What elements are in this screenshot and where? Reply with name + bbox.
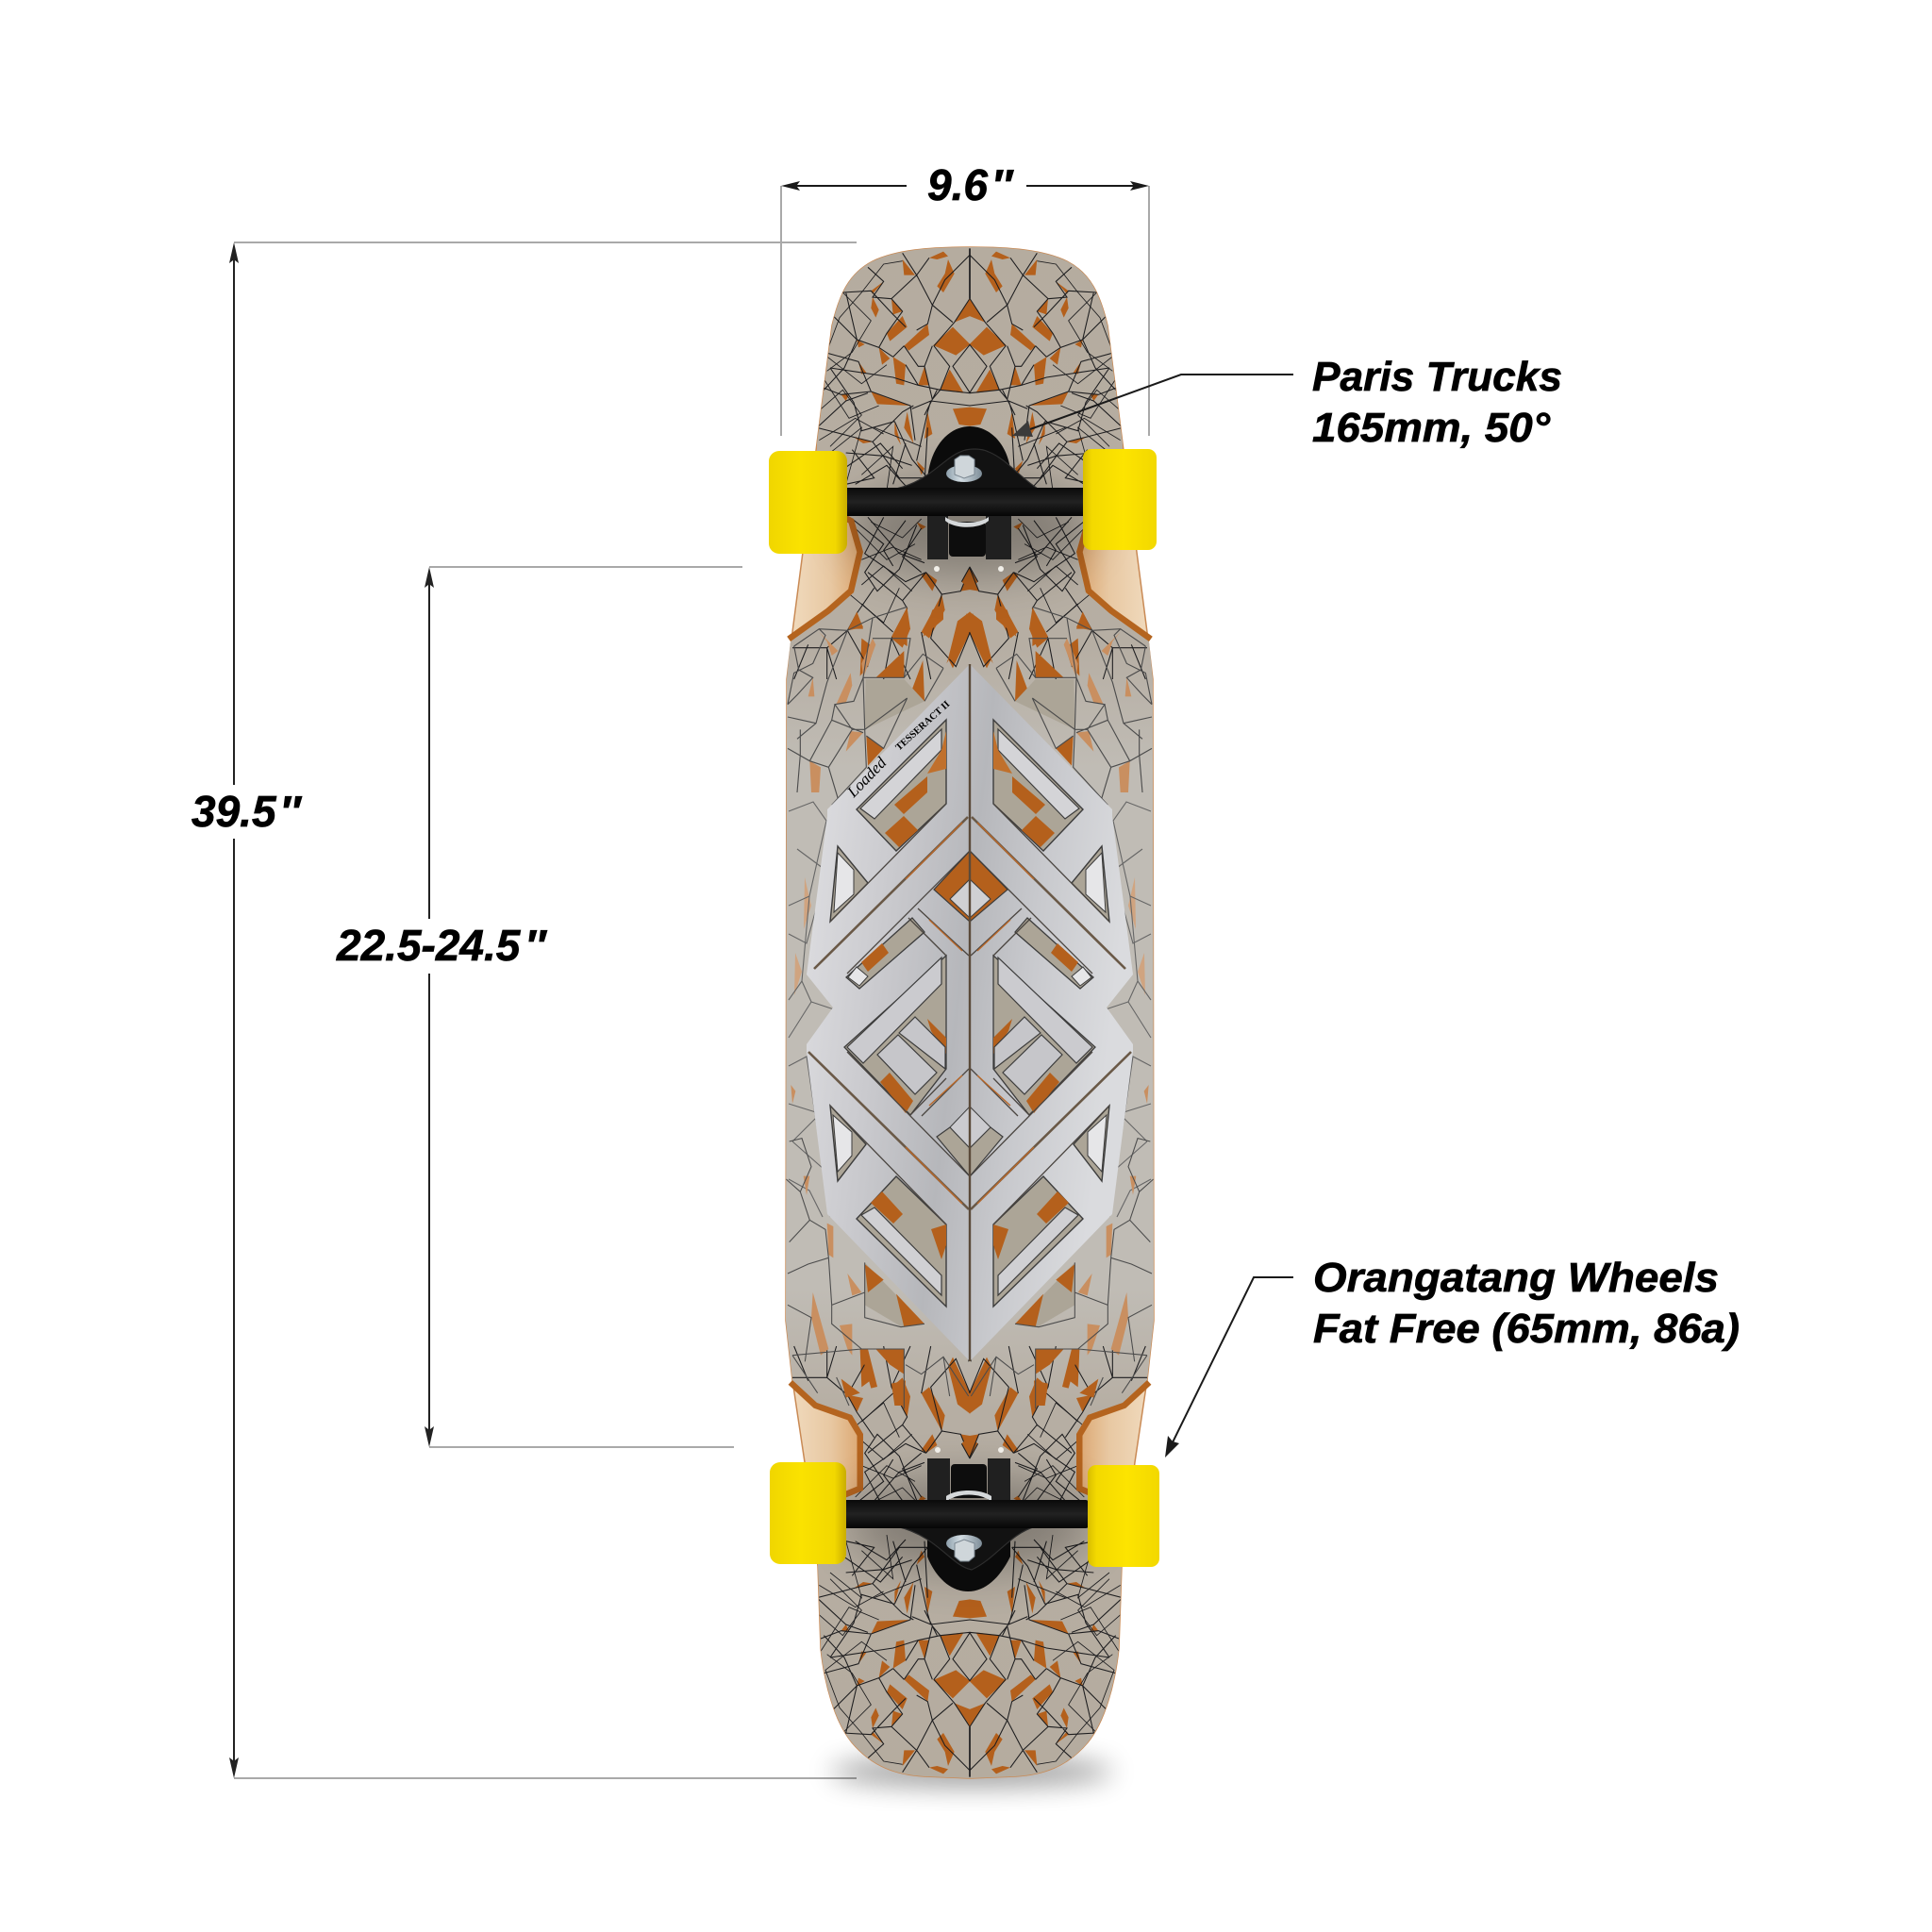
bottom left wheel	[770, 1462, 846, 1564]
baseplate below axle	[927, 1528, 1010, 1591]
callout leader: Paris Trucks	[1012, 375, 1293, 437]
top right wheel	[1083, 449, 1157, 550]
bottom right wheel	[1088, 1465, 1159, 1567]
kingpin nut	[955, 456, 974, 478]
callout text: Paris Trucks: 165mm, 50°	[1312, 405, 1550, 451]
axle	[841, 1500, 1089, 1528]
callout text: Paris Trucks: Paris Trucks	[1312, 354, 1562, 400]
baseplate halves below axle	[927, 514, 1011, 559]
length label: 39.5″	[192, 787, 303, 836]
top Paris truck	[840, 426, 1087, 572]
wheelbase label: 22.5-24.5″	[336, 921, 547, 970]
washer	[945, 517, 989, 527]
pivot cup	[951, 1464, 987, 1498]
top and side width dimension: 9.6 inches	[781, 160, 1149, 436]
logo details	[808, 720, 1131, 1307]
centre seam	[969, 664, 971, 1361]
kingpin washer	[946, 1535, 982, 1552]
top centre diamond	[934, 851, 1008, 922]
stained glass pattern, lower middle	[786, 1085, 1154, 1408]
length extension lines	[234, 242, 857, 1778]
callout text: Orangatang Wheels: Fat Free (65mm, 86a)	[1313, 1306, 1740, 1352]
callout text: Orangatang Wheels	[1313, 1255, 1740, 1352]
stained glass pattern, upper middle	[788, 604, 1152, 805]
pivot cup	[949, 522, 986, 557]
wheelbase extension lines	[429, 567, 742, 1447]
skateboard deck	[774, 236, 1170, 1792]
truck shadows	[847, 481, 1092, 1571]
length arrows	[229, 242, 239, 1778]
kingpin nut	[955, 1540, 974, 1561]
kingpin washer	[946, 465, 982, 482]
mounting bolts	[935, 1447, 1004, 1453]
deck graphic	[774, 236, 1170, 1792]
width arrows	[781, 181, 1149, 191]
silver Tesseract logo	[807, 664, 1133, 1361]
rosewood band around wheel cutouts	[791, 500, 1149, 1509]
callout text: Orangatang Wheels: Orangatang Wheels	[1313, 1255, 1719, 1301]
bottom centre recess	[937, 1127, 1003, 1176]
width label: 9.6″	[927, 160, 1014, 209]
deck wood body	[786, 247, 1154, 1778]
wheelbase arrows	[425, 567, 434, 1447]
callout leader: Orangatang Wheels	[1165, 1277, 1293, 1457]
length dimension: 39.5 inches	[192, 242, 857, 1778]
baseplate above axle	[927, 426, 1011, 481]
ground shadow	[830, 1757, 1113, 1787]
callout text: Paris Trucks	[1312, 354, 1562, 451]
logo silhouette	[807, 664, 1133, 1361]
hanger	[896, 449, 1038, 489]
bottom centre small diamond	[950, 1107, 991, 1148]
baseplate halves above axle	[927, 1458, 1010, 1502]
script brand mark: Loaded	[843, 754, 891, 801]
hanger	[896, 1526, 1036, 1570]
width extension lines	[781, 186, 1149, 436]
stained glass pattern, ends	[792, 248, 1147, 1777]
graphic base	[774, 236, 1170, 1792]
model name: TESSERACT II	[894, 699, 952, 753]
axle	[840, 488, 1087, 516]
bottom Paris truck	[841, 1447, 1089, 1591]
top left wheel	[769, 451, 847, 554]
stained glass pattern, side strips	[789, 802, 1151, 1217]
mounting bolts	[934, 566, 1004, 572]
wheelbase dimension: 22.5-24.5 inches	[336, 567, 742, 1447]
top centre small diamond	[950, 879, 991, 918]
washer	[946, 1491, 991, 1502]
